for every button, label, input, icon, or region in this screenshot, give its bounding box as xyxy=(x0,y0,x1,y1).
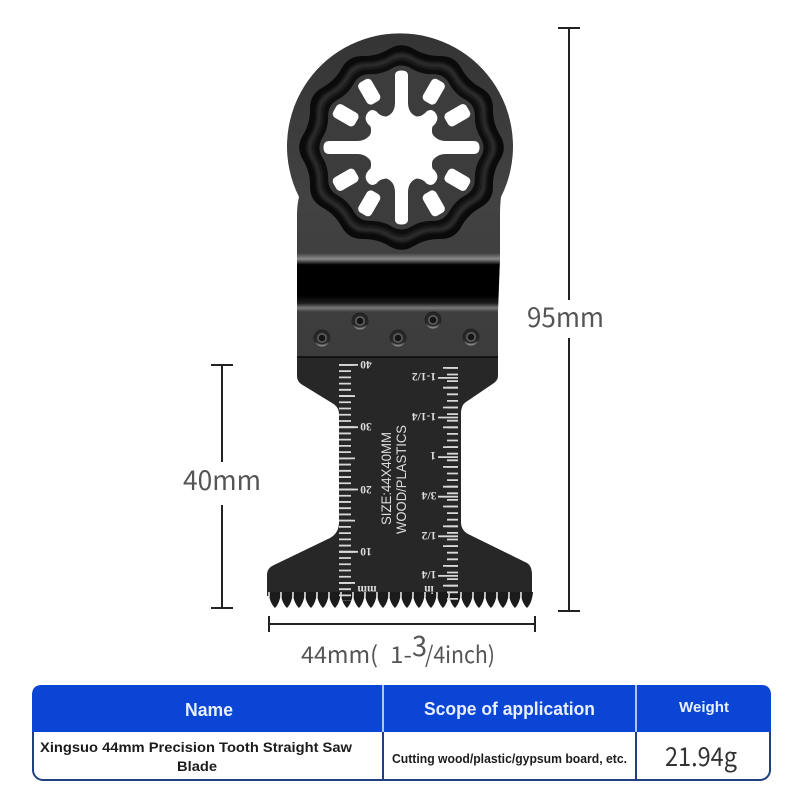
blade size marking: SIZE:44X40MM xyxy=(378,432,394,525)
cell: product name: Xingsuo 44mm Precision Tooth Straight Saw xyxy=(40,739,352,755)
dimension: cutting depth 40mm: 40mm xyxy=(183,459,261,498)
bend band xyxy=(297,253,500,312)
inch ruler: 1-1/2 xyxy=(412,370,436,382)
dimension: cutting depth 40mm xyxy=(183,365,261,608)
header: name: Name xyxy=(185,700,233,720)
inch ruler: 1/2 xyxy=(421,529,436,541)
specification table xyxy=(32,685,771,780)
rivet dimples xyxy=(314,312,480,346)
blade mounting head xyxy=(287,33,513,358)
inch ruler: 1-1/4 xyxy=(412,410,436,422)
central star opening xyxy=(324,70,480,224)
dimension: blade width 44mm xyxy=(269,616,535,670)
header: weight: Weight xyxy=(679,699,729,716)
dimension: overall length 95mm xyxy=(527,28,604,611)
column dividers xyxy=(383,685,636,732)
cell: weight: 21.94g xyxy=(665,737,737,774)
millimetre ruler xyxy=(345,358,377,601)
cell: product name xyxy=(40,739,352,774)
table header xyxy=(32,685,771,732)
eight radial slots xyxy=(331,77,472,218)
saw teeth xyxy=(269,592,533,608)
millimetre ruler: 30 xyxy=(360,420,372,432)
inch ruler: 1 xyxy=(430,449,436,461)
inch ruler xyxy=(412,367,452,601)
saw blade xyxy=(267,33,533,608)
millimetre ruler: mm xyxy=(357,583,377,595)
cutting section xyxy=(267,357,532,596)
millimetre ruler: 10 xyxy=(360,545,372,557)
cell: product name: Blade xyxy=(177,758,217,774)
starlock mount recess xyxy=(299,45,504,250)
cell: scope: Cutting wood/plastic/gypsum board, etc. xyxy=(392,752,627,766)
dimension: blade width 44mm: 3 xyxy=(412,625,427,665)
table body xyxy=(33,686,770,780)
dimension: overall length 95mm: 95mm xyxy=(527,296,604,335)
inch ruler: 3/4 xyxy=(421,489,436,501)
dimension: blade width 44mm: 44mm( xyxy=(301,636,378,670)
blade material marking: WOOD/PLASTICS xyxy=(393,425,409,534)
dimension: blade width 44mm: 1- xyxy=(390,636,412,670)
inch ruler: in xyxy=(424,583,434,595)
millimetre ruler: 40 xyxy=(360,358,372,370)
header: scope of application: Scope of application xyxy=(424,699,595,719)
inch ruler: 1/4 xyxy=(421,568,436,580)
millimetre ruler: 20 xyxy=(360,483,372,495)
dimension: blade width 44mm: /4inch) xyxy=(425,636,495,670)
white notches between teeth xyxy=(269,592,521,597)
